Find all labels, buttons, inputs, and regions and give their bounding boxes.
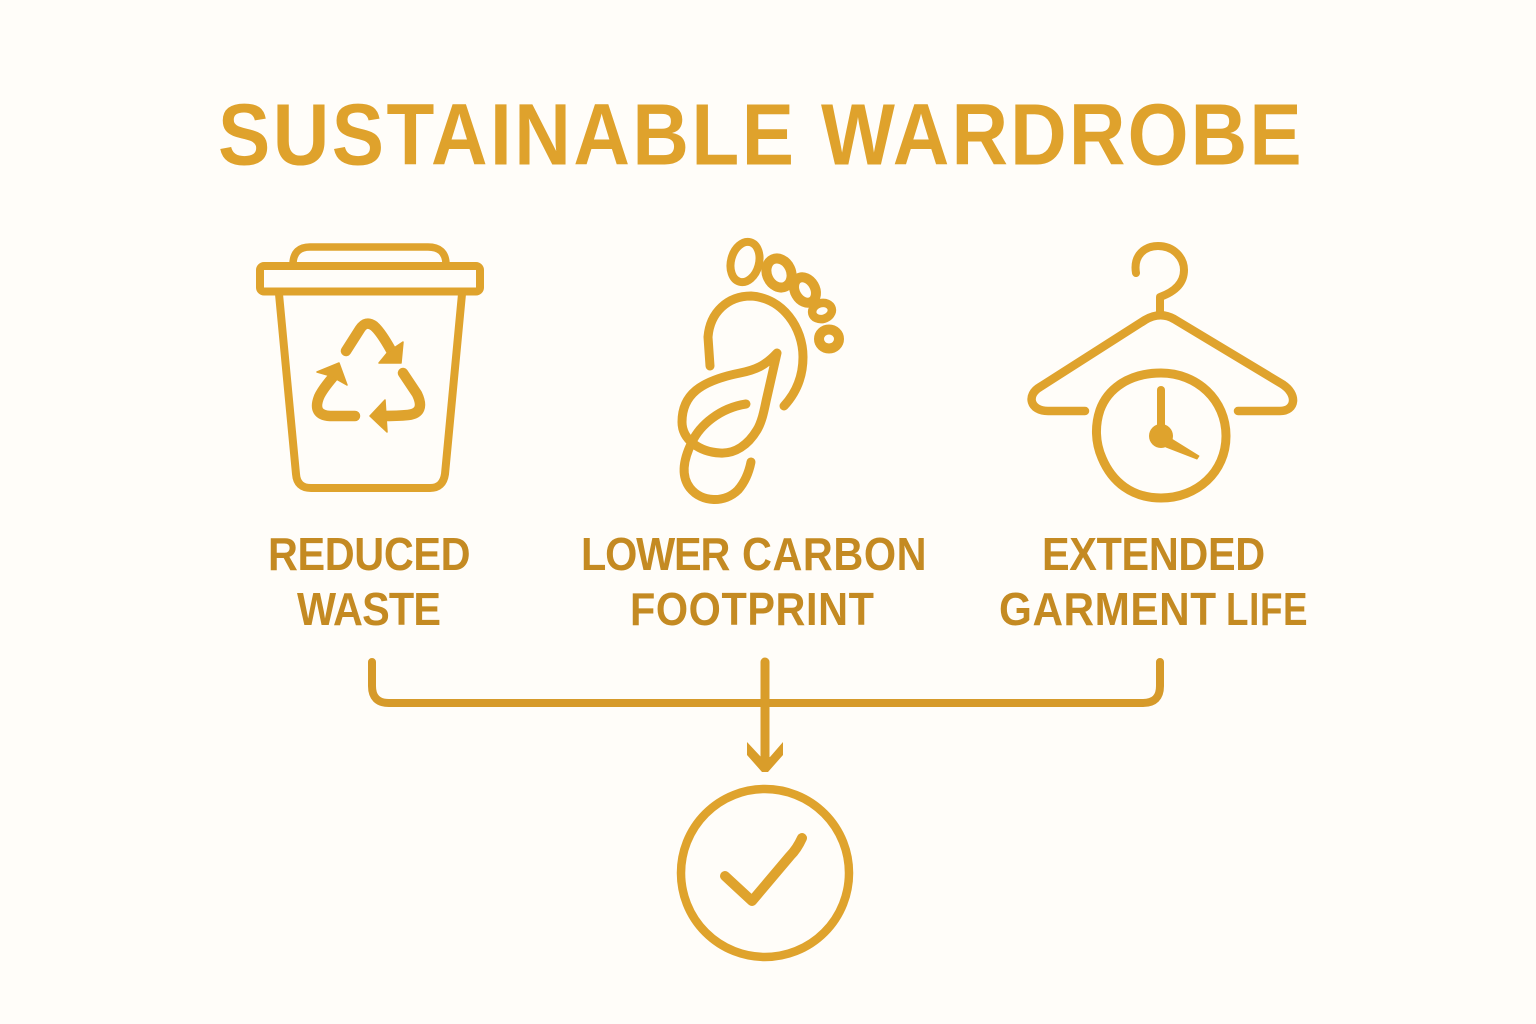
label: reduced waste xyxy=(268,529,470,636)
icon: leaf footprint xyxy=(682,239,839,500)
title: SUSTAINABLE xyxy=(218,86,794,183)
toes xyxy=(726,239,839,348)
leaf outline xyxy=(682,353,777,453)
title xyxy=(218,86,1302,183)
hanger body xyxy=(1032,315,1293,411)
leaf vein and heel xyxy=(684,404,751,500)
bin lid handle xyxy=(293,247,446,263)
icon: check mark in circle xyxy=(681,789,849,957)
label: lower carbon footprint xyxy=(581,529,926,636)
arrow: down to result xyxy=(747,662,783,772)
label: extended garment life: GARMENT xyxy=(999,584,1216,635)
label: lower carbon footprint: LOWER xyxy=(581,529,730,581)
icon: recycling bin xyxy=(260,247,480,488)
bin lid xyxy=(260,266,480,292)
clock face xyxy=(1096,373,1226,498)
label: extended garment life: LIFE xyxy=(1226,583,1308,635)
label: extended garment life: EXTENDED xyxy=(1042,529,1265,581)
connector bracket xyxy=(372,662,1160,703)
label: reduced waste: REDUCED xyxy=(268,529,471,581)
icon: hanger with clock xyxy=(1032,246,1293,498)
bin body xyxy=(279,294,462,488)
recycling symbol xyxy=(317,324,420,432)
label: lower carbon footprint: CARBON xyxy=(742,529,927,581)
hanger hook xyxy=(1136,246,1184,315)
foot outline xyxy=(708,296,803,406)
clock hands xyxy=(1149,390,1199,459)
label: lower carbon footprint: FOOTPRINT xyxy=(630,584,874,636)
label: extended garment life xyxy=(999,529,1308,635)
title: WARDROBE xyxy=(821,86,1302,183)
label: reduced waste: WASTE xyxy=(297,584,441,636)
